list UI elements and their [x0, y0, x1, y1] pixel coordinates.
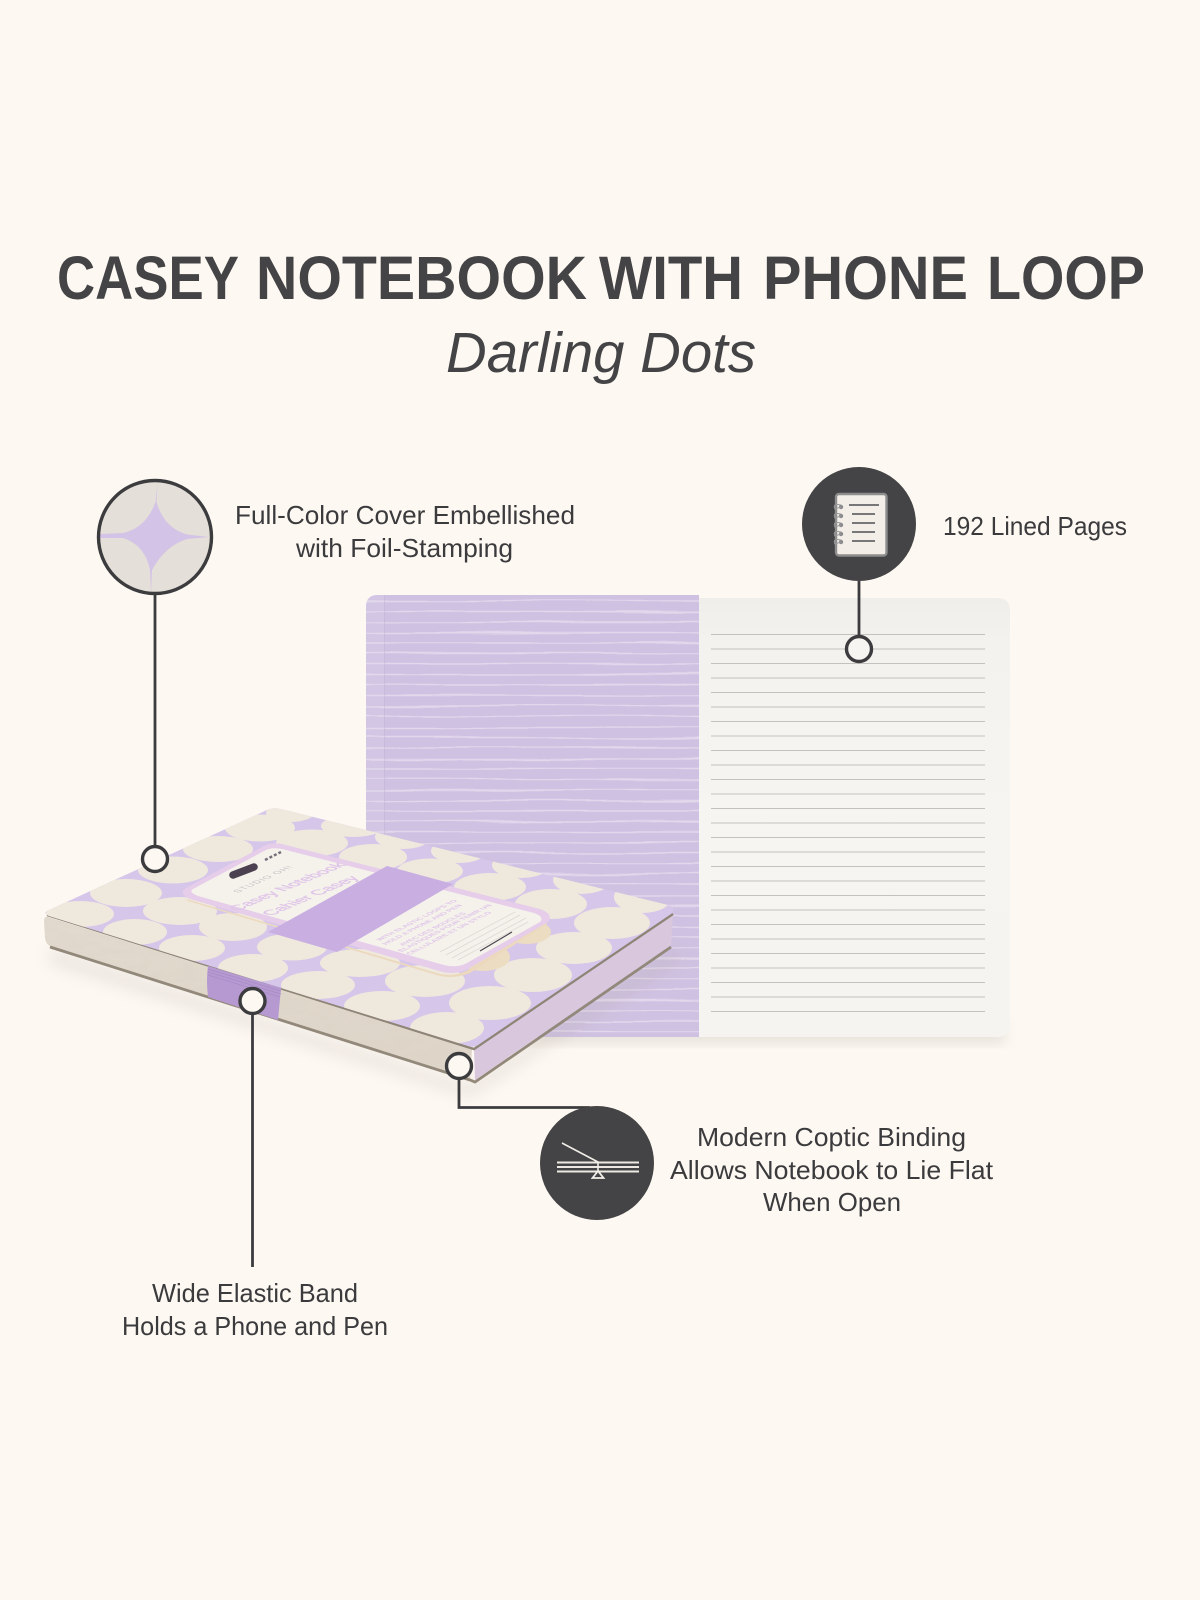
title: WITH [599, 244, 743, 312]
marker dot [846, 636, 872, 662]
closed notebook shadow [50, 950, 680, 1096]
label [235, 500, 575, 563]
cover edge lines [47, 914, 673, 1049]
title: CASEY [57, 244, 239, 312]
card description text: WITH ELASTIC LOOPS TO [375, 899, 460, 941]
open notebook [355, 595, 1010, 1044]
label: Wide Elastic Band [152, 1278, 358, 1308]
leader line [251, 1014, 254, 1267]
card subtitle text: Cahier Casey [258, 875, 364, 917]
card title text: Casey Notebook [225, 861, 352, 912]
leader line [459, 1079, 590, 1108]
label: with Foil-Stamping [295, 533, 513, 563]
label: When Open [763, 1187, 901, 1217]
card description text: CELLULAIRE ET UN STYLO [405, 911, 495, 955]
callout: coptic binding [446, 1054, 994, 1220]
card fine print [440, 912, 528, 960]
phone camera pill [233, 867, 254, 875]
notebook shadow [385, 1022, 1005, 1044]
title: LOOP [987, 244, 1145, 312]
marker dot [240, 988, 265, 1014]
label: 192 Lined Pages [943, 511, 1127, 541]
card under-layer [186, 899, 547, 977]
callout: elastic band [122, 988, 388, 1341]
phone status icons [265, 852, 281, 860]
closed notebook fore-edge [474, 913, 673, 1080]
closed notebook spine [44, 917, 472, 1079]
elastic band on cover [268, 866, 453, 952]
card border [183, 843, 550, 973]
marker dot [446, 1054, 472, 1078]
closed notebook [44, 804, 680, 1096]
label: Modern Coptic Binding [697, 1122, 966, 1152]
callout: cover foil stamping [98, 480, 575, 872]
home indicator [480, 932, 512, 951]
marker dot [142, 846, 168, 872]
leader line [858, 581, 860, 637]
elastic band on spine [207, 966, 281, 1020]
title: NOTEBOOK [256, 244, 587, 312]
subtitle: Darling Dots [446, 321, 756, 385]
icon: star swatch [98, 480, 212, 594]
card description text: AVEC DES BOUCLES [398, 912, 469, 946]
closed notebook cover with dots [46, 804, 673, 1047]
card description text: HOLD A PHONE AND PEN [381, 904, 465, 945]
label [122, 1278, 388, 1341]
label: Allows Notebook to Lie Flat [670, 1155, 994, 1185]
label: Full-Color Cover Embellished [235, 500, 575, 530]
panel: right lined page [699, 598, 1010, 1037]
phone loop card [183, 843, 550, 977]
icon: binding [540, 1106, 654, 1220]
leader line [154, 595, 156, 846]
label: Holds a Phone and Pen [122, 1311, 388, 1341]
callout: lined pages [802, 467, 1127, 662]
label [670, 1122, 994, 1217]
title [57, 244, 1145, 312]
icon: spiral notebook [802, 467, 916, 581]
panel: left inside cover with wavy stripes [355, 595, 705, 1037]
title: PHONE [763, 244, 968, 312]
card brand text: STUDIO OH! [230, 865, 296, 894]
card face [191, 848, 542, 966]
card description text: ÉLASTIQUES POUR TENIR UN [395, 903, 494, 952]
